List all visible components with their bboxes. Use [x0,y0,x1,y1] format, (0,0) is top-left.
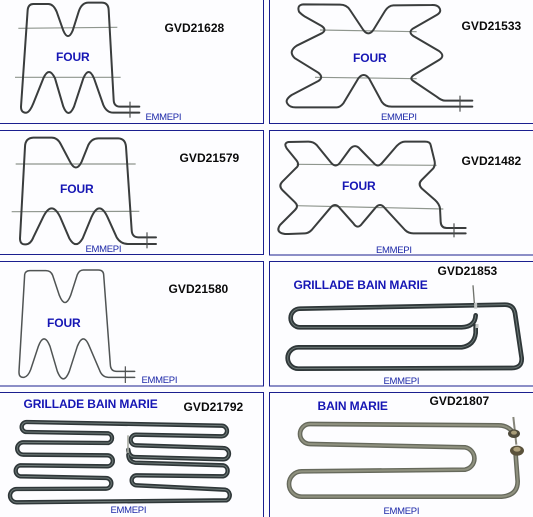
product code: GVD21792 [184,400,244,414]
panel: GVD21579 [0,130,533,255]
product code: GVD21628 [164,21,225,35]
icon: terminal nuts [508,417,524,456]
label: GRILLADE BAIN MARIE: GRILLADE BAIN MARIE [24,397,158,411]
brand: EMMEPI [86,244,121,255]
element drawing: GVD21580 oven element [19,270,135,383]
brand: EMMEPI [110,505,146,516]
brand: EMMEPI [384,506,419,517]
panel: GVD21807 [270,392,533,517]
label: FOUR: FOUR [353,51,387,65]
brand: EMMEPI [384,376,419,387]
product code: GVD21482 [462,154,522,168]
element drawing: GVD21482 oven element [278,142,466,237]
label: GRILLADE BAIN MARIE: GRILLADE BAIN MARIE [294,278,428,292]
product code: GVD21579 [180,151,240,165]
element drawing: GVD21792 grill element [10,422,230,502]
panel: GVD21482 [278,142,522,256]
brand: EMMEPI [381,112,417,123]
label: FOUR: FOUR [60,182,94,196]
brand: EMMEPI [146,112,181,123]
element drawing: GVD21807 bain marie element [289,417,524,497]
product code: GVD21580 [168,282,229,296]
element drawing: GVD21579 oven element [12,138,156,248]
product code: GVD21853 [438,264,498,278]
panel: GVD21580 [0,262,264,386]
element drawing: GVD21628 oven element [15,3,139,118]
panel: GVD21628 [0,0,533,124]
label: FOUR: FOUR [47,316,81,330]
element drawing: GVD21533 oven element [287,4,472,112]
label: BAIN MARIE: BAIN MARIE [318,399,388,413]
product code: GVD21533 [462,19,522,33]
panel: GVD21533 [287,4,522,123]
label: FOUR: FOUR [56,50,90,64]
panel: GVD21792 [0,392,264,517]
label: FOUR: FOUR [342,179,376,193]
brand: EMMEPI [376,245,412,256]
brand: EMMEPI [142,375,177,386]
product code: GVD21807 [430,394,490,408]
panel: GVD21853 [270,262,533,387]
element drawing: GVD21853 grill element [288,285,522,369]
